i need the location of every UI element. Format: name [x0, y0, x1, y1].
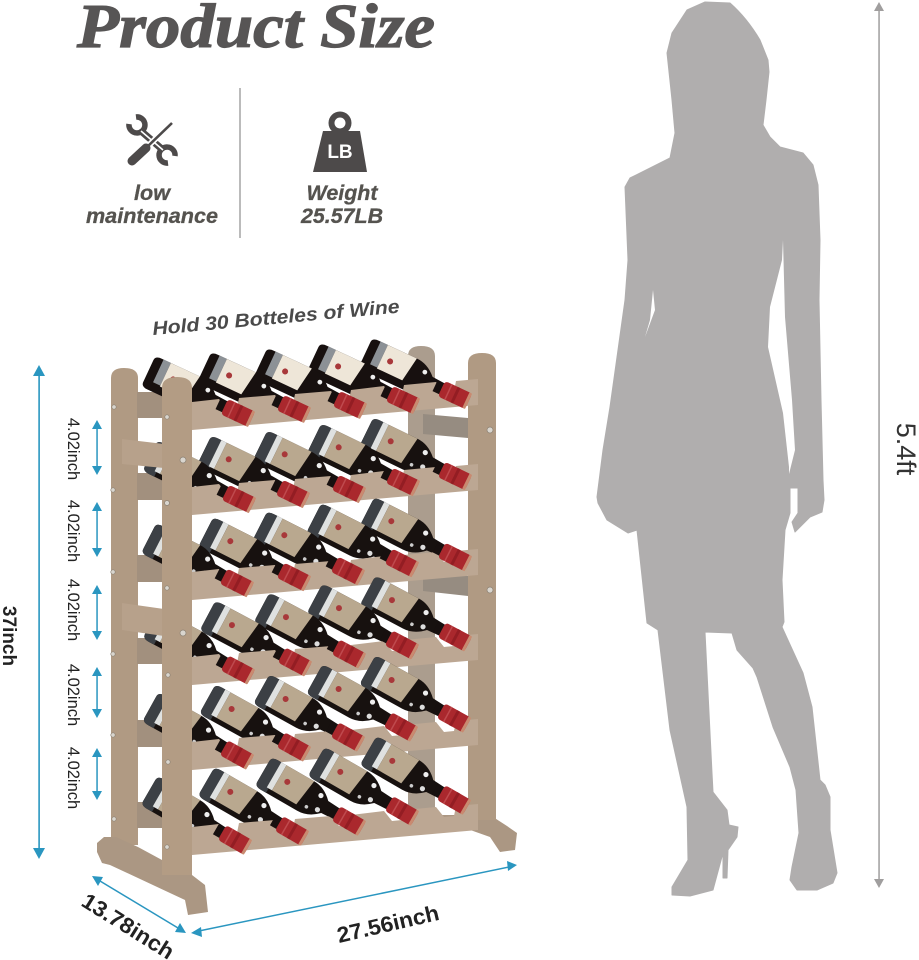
bottle row 1 — [141, 338, 478, 430]
arrow: rack height 37 inch — [33, 365, 45, 859]
icon: LB weight — [313, 114, 367, 172]
arrow: depth — [92, 876, 186, 933]
icon: LB weight: LB — [327, 142, 353, 163]
wine rack with bottles — [97, 338, 517, 915]
arrow: width — [191, 861, 517, 937]
bottle row 4 — [143, 576, 478, 685]
arrow: person height — [874, 2, 884, 888]
front left post — [162, 377, 192, 875]
left foot — [97, 837, 208, 915]
bottle row 6 — [141, 736, 478, 855]
right foot — [428, 815, 517, 852]
bottle row 2 — [143, 417, 478, 515]
shelf spacing labels: 4.02inch — [64, 500, 82, 562]
bottle row 3 — [141, 497, 478, 600]
shelf spacing labels: 4.02inch — [64, 418, 82, 480]
shelf spacing labels: 4.02inch — [64, 579, 82, 641]
front crossbars — [122, 439, 164, 636]
shelf spacing labels — [64, 418, 82, 809]
front right post — [468, 353, 496, 820]
back right post — [408, 346, 435, 815]
screws — [111, 405, 493, 849]
text: low maintenance: maintenance — [86, 203, 218, 228]
silhouette: woman — [597, 2, 837, 896]
back right rails — [423, 414, 468, 596]
text: low maintenance: low — [134, 180, 171, 205]
shelf spacing labels: 4.02inch — [64, 747, 82, 809]
silhouette gaps — [645, 240, 795, 474]
text: weight: 25.57LB — [300, 204, 383, 228]
capacity caption: Hold 30 Botteles of Wine — [152, 297, 401, 340]
shelf spacing labels: 4.02inch — [64, 664, 82, 726]
left side rails — [137, 392, 164, 828]
bottle row 5 — [142, 655, 478, 770]
shelf spacing arrows — [92, 420, 102, 800]
label: 27.56inch: 27.56inch — [335, 900, 441, 948]
icon: wrench and screwdriver — [129, 117, 175, 163]
back left post — [111, 368, 138, 845]
text: weight: Weight — [307, 181, 378, 205]
